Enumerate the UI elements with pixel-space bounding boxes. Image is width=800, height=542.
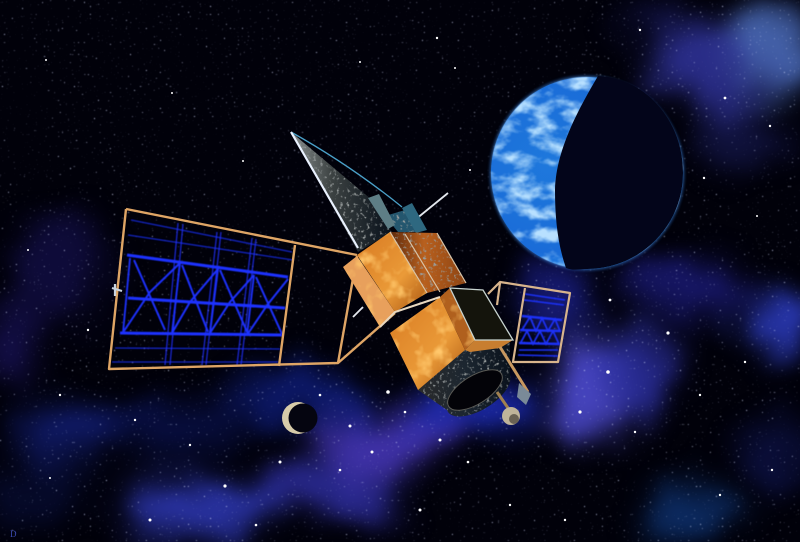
blue lattice bbox=[518, 294, 565, 356]
planet atmosphere glow bbox=[490, 76, 684, 270]
probe ball on strut bbox=[497, 392, 520, 425]
conical shield bbox=[291, 132, 402, 252]
cone lit edge bbox=[291, 132, 358, 248]
upper body: side face bbox=[343, 256, 395, 327]
array frame bbox=[109, 209, 395, 369]
boom and thruster bbox=[500, 347, 531, 405]
upper body: ribbed face bbox=[390, 232, 466, 293]
moon bbox=[282, 402, 318, 434]
nozzle body bbox=[418, 340, 511, 417]
planet night side bbox=[555, 76, 683, 270]
blue lattice bbox=[112, 220, 293, 365]
cone body bbox=[291, 132, 392, 252]
lower body: front face bbox=[390, 297, 465, 390]
central truss arm bbox=[380, 297, 440, 327]
upper body: front face bbox=[357, 232, 427, 312]
cone wire edge bbox=[291, 132, 402, 207]
planet bbox=[490, 76, 684, 270]
array frame bbox=[488, 282, 570, 362]
right solar array bbox=[488, 282, 570, 362]
rib highlights bbox=[390, 232, 466, 293]
lower body: side face bbox=[440, 288, 475, 350]
planet lit side with cloud swirls bbox=[491, 77, 683, 269]
lower body: gold band bbox=[465, 340, 513, 352]
nozzle opening bbox=[441, 362, 509, 418]
cylinder engine nozzle bbox=[418, 340, 511, 418]
antenna rod bbox=[353, 193, 448, 317]
instrument tubes bbox=[368, 194, 427, 233]
artist signature mark: D bbox=[10, 529, 17, 539]
dark aperture face bbox=[450, 288, 513, 340]
left solar array bbox=[109, 209, 395, 369]
array hinge bbox=[112, 284, 122, 296]
satellite bbox=[109, 132, 570, 425]
